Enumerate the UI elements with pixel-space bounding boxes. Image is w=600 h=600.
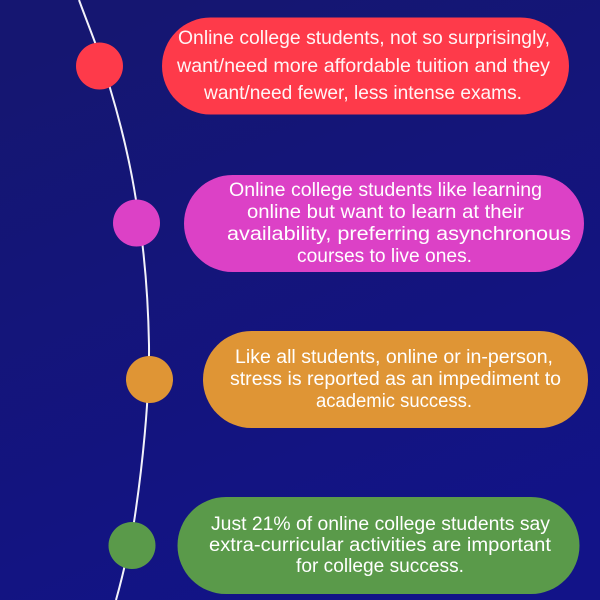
text: item 1: Online college students, not so surprisingly, xyxy=(178,27,550,49)
item 3: stress xyxy=(126,331,588,428)
text: item 3 xyxy=(230,347,561,412)
marker: green circle xyxy=(108,522,156,569)
text: item 1 xyxy=(176,27,550,104)
text: item 4: Just 21% of online college students say xyxy=(211,514,550,535)
pill: red xyxy=(162,18,569,114)
text: item 2: Online college students like learning xyxy=(229,180,542,201)
text: item 2: online but want to learn at their xyxy=(247,202,525,223)
text: item 1: want/need fewer, less intense exams. xyxy=(203,82,522,104)
item 2: asynchronous xyxy=(113,175,584,272)
marker: orange circle xyxy=(126,356,173,403)
marker: red circle xyxy=(76,42,123,90)
item 1: affordability xyxy=(76,18,569,114)
text: item 4: extra-curricular activities are important xyxy=(209,535,552,556)
item 4: extra-curriculars xyxy=(108,497,580,594)
text: item 4: for college success. xyxy=(296,556,464,577)
text: item 3: stress is reported as an impediment to xyxy=(230,369,561,390)
text: item 2 xyxy=(227,180,571,267)
timeline curve xyxy=(79,0,149,600)
pill: orange xyxy=(203,331,588,428)
text: item 3: Like all students, online or in-person, xyxy=(235,347,553,368)
pill: magenta xyxy=(184,175,584,272)
text: item 1: want/need more affordable tuition and they xyxy=(176,55,550,77)
text: item 2: availability, preferring asynchronous xyxy=(227,224,571,245)
text: item 4 xyxy=(209,514,552,577)
text: item 2: courses to live ones. xyxy=(297,246,472,267)
marker: magenta circle xyxy=(113,200,160,246)
pill: green xyxy=(178,497,580,594)
text: item 3: academic success. xyxy=(316,391,472,412)
